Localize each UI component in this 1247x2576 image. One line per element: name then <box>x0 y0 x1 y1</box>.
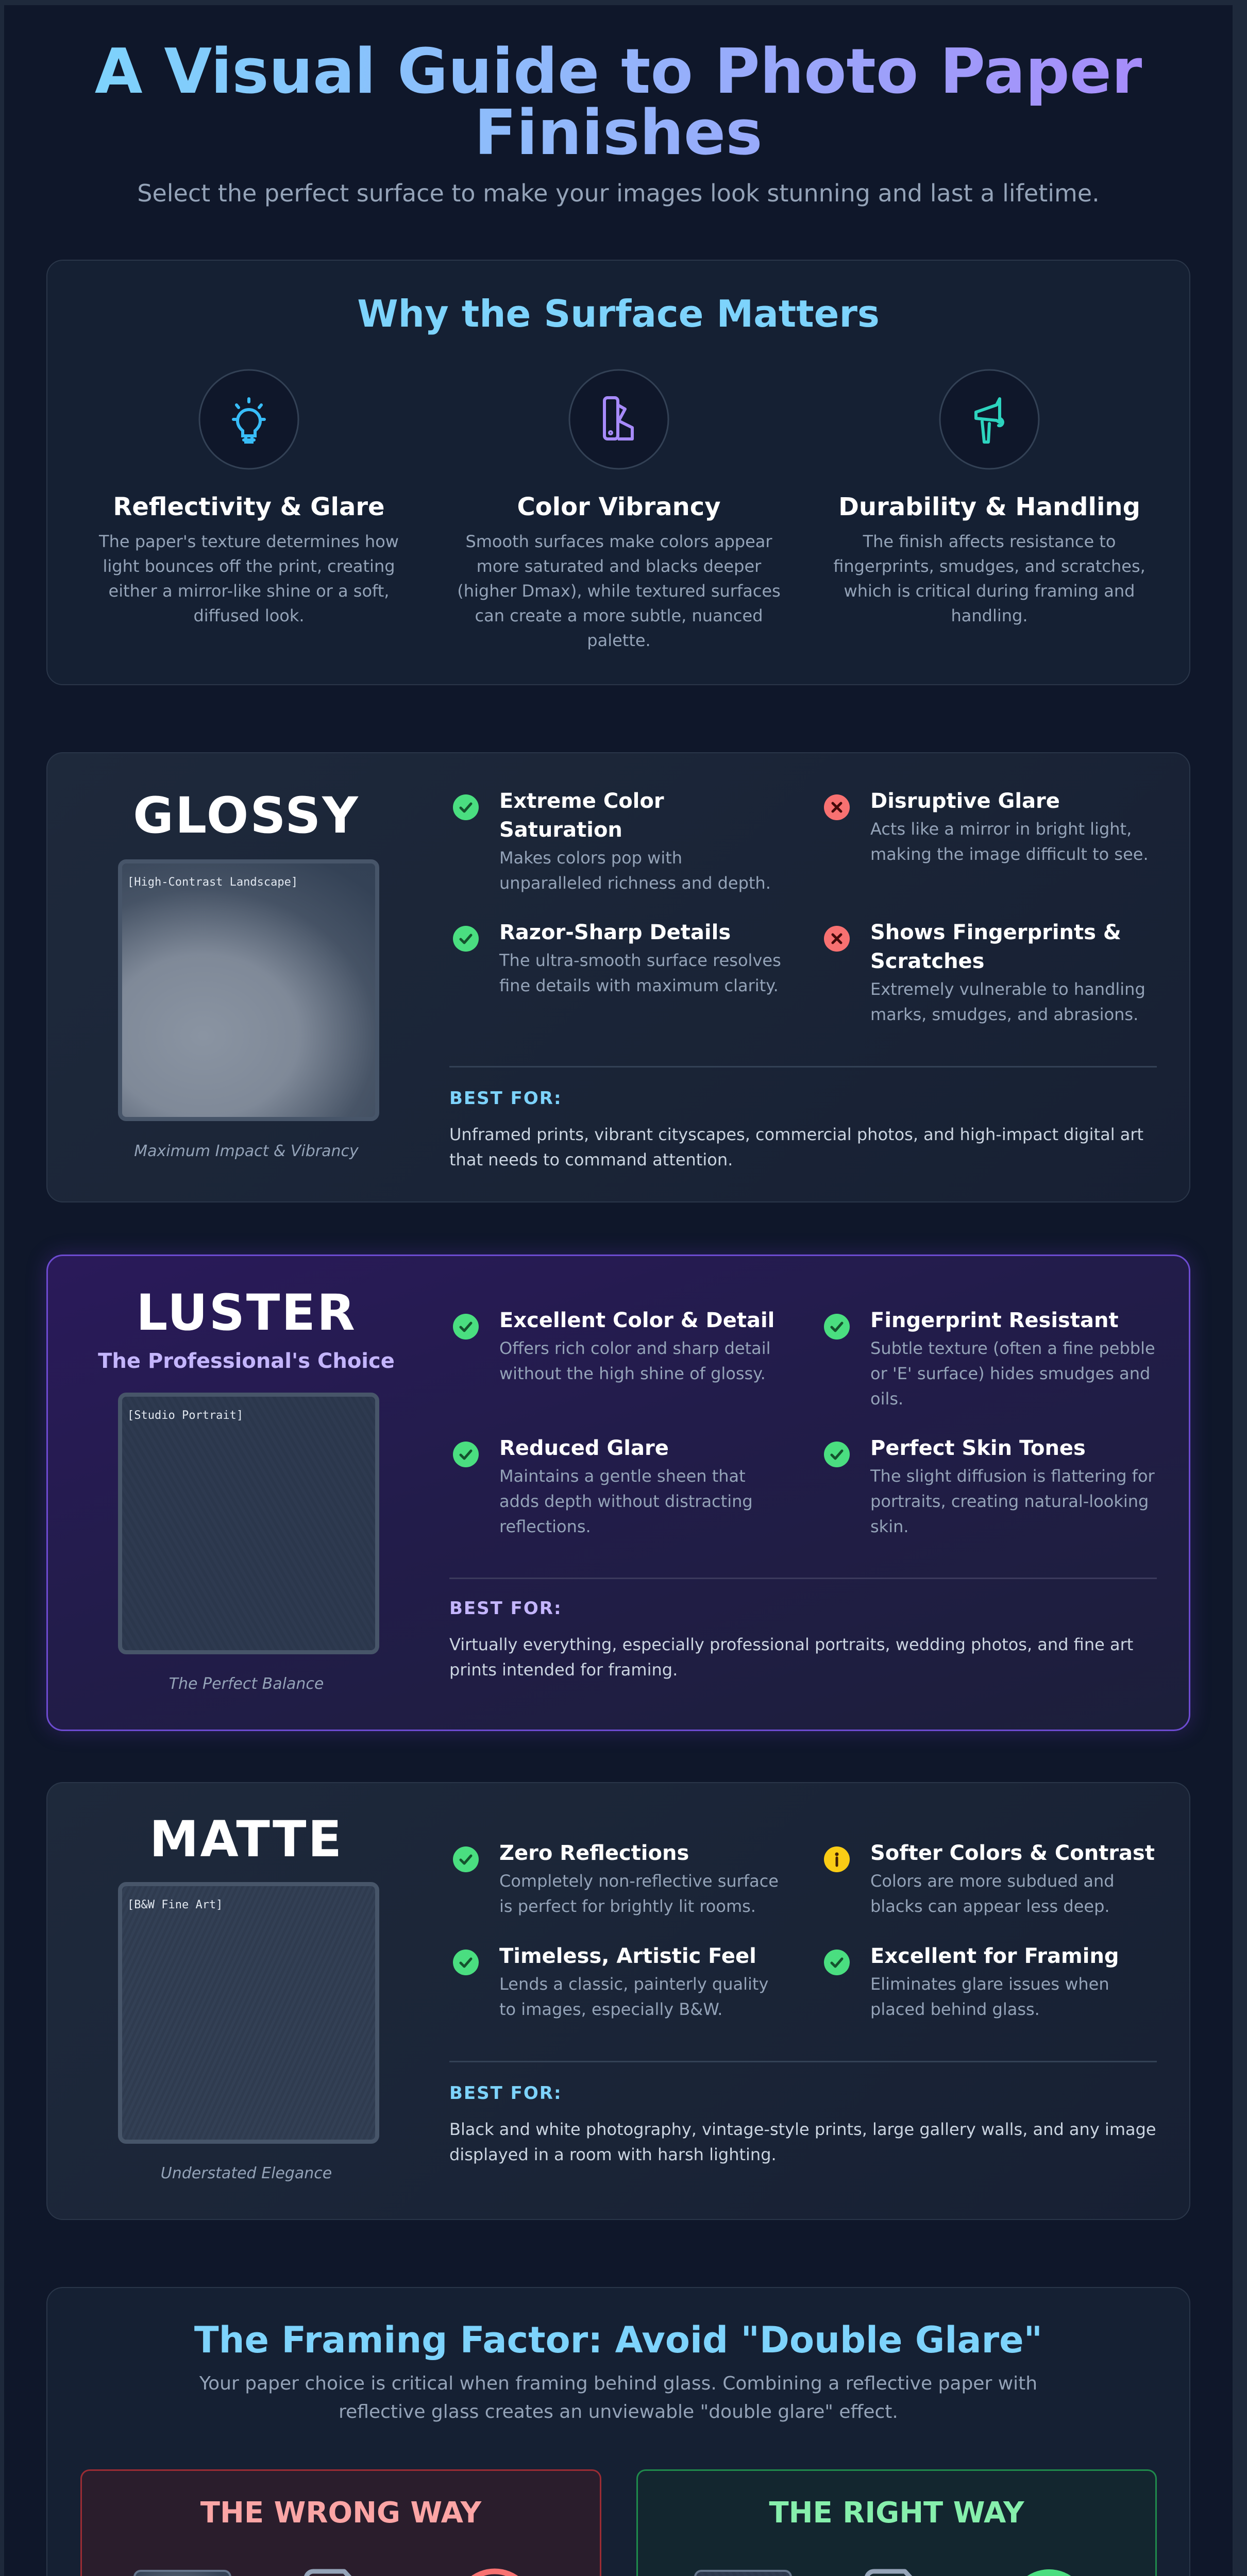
glossy feature: glare <box>824 789 1149 864</box>
matte best for: BEST FOR: <box>449 2083 562 2104</box>
luster feature: color <box>453 1309 774 1383</box>
column: reflectivity <box>99 369 399 625</box>
glossy feature: details <box>453 921 781 995</box>
matte feature: reflections: Completely non-reflective surface is perfect for brightly lit rooms. <box>499 1871 779 1916</box>
luster best for: BEST FOR: <box>449 1598 562 1619</box>
luster feature: glare: Reduced Glare <box>499 1436 669 1460</box>
matte title: MATTE <box>149 1810 343 1868</box>
column: durability: The finish affects resistance to fingerprints, smudges, and scratches, which is critical during framing and handling. <box>833 532 1145 625</box>
luster feature: color: Excellent Color & Detail <box>499 1309 774 1332</box>
box: right way <box>636 2469 1157 2576</box>
glossy feature: saturation <box>453 789 771 893</box>
luster feature: fingerprint: Fingerprint Resistant <box>870 1309 1119 1332</box>
matte feature: timeless: Lends a classic, painterly quality to images, especially B&W. <box>499 1974 768 2019</box>
glossy feature: details: The ultra-smooth surface resolves fine details with maximum clarity. <box>499 951 781 995</box>
panel: luster <box>46 1255 1190 1731</box>
icon: swatch <box>569 369 669 470</box>
icon: hand <box>939 369 1040 470</box>
luster image placeholder: [Studio Portrait] <box>127 1409 243 1422</box>
matte feature: framing: Eliminates glare issues when placed behind glass. <box>870 1974 1109 2019</box>
luster feature: skin: The slight diffusion is flattering for portraits, creating natural-looking skin. <box>870 1466 1155 1536</box>
luster feature: skin <box>824 1436 1155 1536</box>
panel: framing factor <box>46 2287 1190 2576</box>
column: reflectivity: Reflectivity & Glare <box>113 493 385 521</box>
column: durability: Durability & Handling <box>838 493 1140 521</box>
luster image placeholder <box>118 1393 379 1654</box>
luster feature: color: Offers rich color and sharp detail without the high shine of glossy. <box>499 1338 771 1383</box>
glossy feature: fingerprints <box>824 921 1145 1024</box>
matte feature: reflections <box>452 1839 787 1942</box>
matte feature: framing: Excellent for Framing <box>870 1944 1119 1968</box>
subtitle: Select the perfect surface to make your images look stunning and last a lifetime. <box>137 179 1100 207</box>
glossy feature: saturation: Extreme Color Saturation <box>499 789 664 842</box>
glossy feature: details: Razor-Sharp Details <box>499 921 731 944</box>
title: A Visual Guide to Photo Paper Finishes <box>95 36 1142 169</box>
glossy title: GLOSSY <box>133 787 360 844</box>
luster caption: The Perfect Balance <box>169 1675 324 1693</box>
luster subtitle: The Professional's Choice <box>98 1349 395 1373</box>
equation: luster + glass = clear <box>638 2566 1155 2576</box>
column: color vibrancy: Smooth surfaces make colors appear more saturated and blacks deeper (higher Dmax), while textured surfaces can create a more subtle, nuanced palette. <box>457 532 781 650</box>
heading: why: Why the Surface Matters <box>357 292 880 335</box>
matte best for <box>449 2061 1157 2167</box>
luster best for <box>449 1578 1157 1680</box>
glossy best for: BEST FOR: <box>449 1088 562 1109</box>
matte feature: softer colors: Softer Colors & Contrast <box>870 1841 1155 1865</box>
matte feature: reflections: Zero Reflections <box>499 1841 689 1865</box>
panel: glossy <box>46 752 1190 1202</box>
glossy feature: glare: Disruptive Glare <box>870 789 1060 813</box>
luster feature: fingerprint <box>824 1309 1155 1409</box>
matte feature: framing <box>823 1942 1158 2045</box>
glossy feature: fingerprints: Shows Fingerprints & Scratches <box>870 921 1121 973</box>
heading: framing: The Framing Factor: Avoid "Double Glare" <box>194 2319 1042 2361</box>
luster feature: fingerprint: Subtle texture (often a fine pebble or 'E' surface) hides smudges and oils. <box>870 1338 1155 1409</box>
panel: matte <box>46 1782 1190 2220</box>
matte best for: Black and white photography, vintage-style prints, large gallery walls, and any image displayed in a room with harsh lighting. <box>449 2120 1156 2164</box>
luster feature: glare: Maintains a gentle sheen that adds depth without distracting reflections. <box>499 1466 753 1536</box>
glossy feature: fingerprints: Extremely vulnerable to handling marks, smudges, and abrasions. <box>870 979 1145 1024</box>
glossy best for <box>449 1066 1157 1170</box>
matte feature: softer colors: Colors are more subdued and blacks can appear less deep. <box>870 1871 1115 1916</box>
right way heading: THE RIGHT WAY <box>769 2496 1024 2530</box>
glossy image placeholder: [High-Contrast Landscape] <box>127 876 298 889</box>
glossy feature: glare: Acts like a mirror in bright light, making the image difficult to see. <box>870 819 1149 864</box>
luster best for: Virtually everything, especially professional portraits, wedding photos, and fine art prints intended for framing. <box>449 1635 1133 1680</box>
glossy feature: saturation: Makes colors pop with unparalleled richness and depth. <box>499 848 771 893</box>
matte feature: timeless <box>452 1942 787 2045</box>
glossy best for: Unframed prints, vibrant cityscapes, commercial photos, and high-impact digital art that needs to command attention. <box>449 1125 1143 1170</box>
matte image placeholder: [B&W Fine Art] <box>127 1899 223 1911</box>
luster feature: skin: Perfect Skin Tones <box>870 1436 1086 1460</box>
icon: lightbulb <box>199 369 299 470</box>
column: reflectivity: The paper's texture determines how light bounces off the print, creating either a mirror-like shine or a soft, diffused look. <box>99 532 399 625</box>
column: color vibrancy <box>457 369 781 650</box>
column: durability <box>833 369 1145 625</box>
wrong way heading: THE WRONG WAY <box>200 2496 481 2530</box>
luster title: LUSTER <box>136 1284 357 1342</box>
panel: why the surface matters <box>46 260 1190 685</box>
matte feature: softer colors <box>823 1839 1158 1942</box>
column: color vibrancy: Color Vibrancy <box>517 493 721 521</box>
glossy image placeholder <box>118 859 379 1121</box>
luster feature: glare <box>453 1436 753 1536</box>
box: wrong way <box>80 2469 601 2576</box>
glossy caption: Maximum Impact & Vibrancy <box>134 1142 359 1160</box>
matte caption: Understated Elegance <box>161 2164 332 2182</box>
framing description: Your paper choice is critical when framing behind glass. Combining a reflective paper with reflective glass creates an unviewable "double glare" effect. <box>199 2373 1037 2422</box>
matte image placeholder <box>118 1882 379 2144</box>
equation: glossy + glass = glare <box>82 2566 600 2576</box>
matte feature: timeless: Timeless, Artistic Feel <box>499 1944 756 1968</box>
